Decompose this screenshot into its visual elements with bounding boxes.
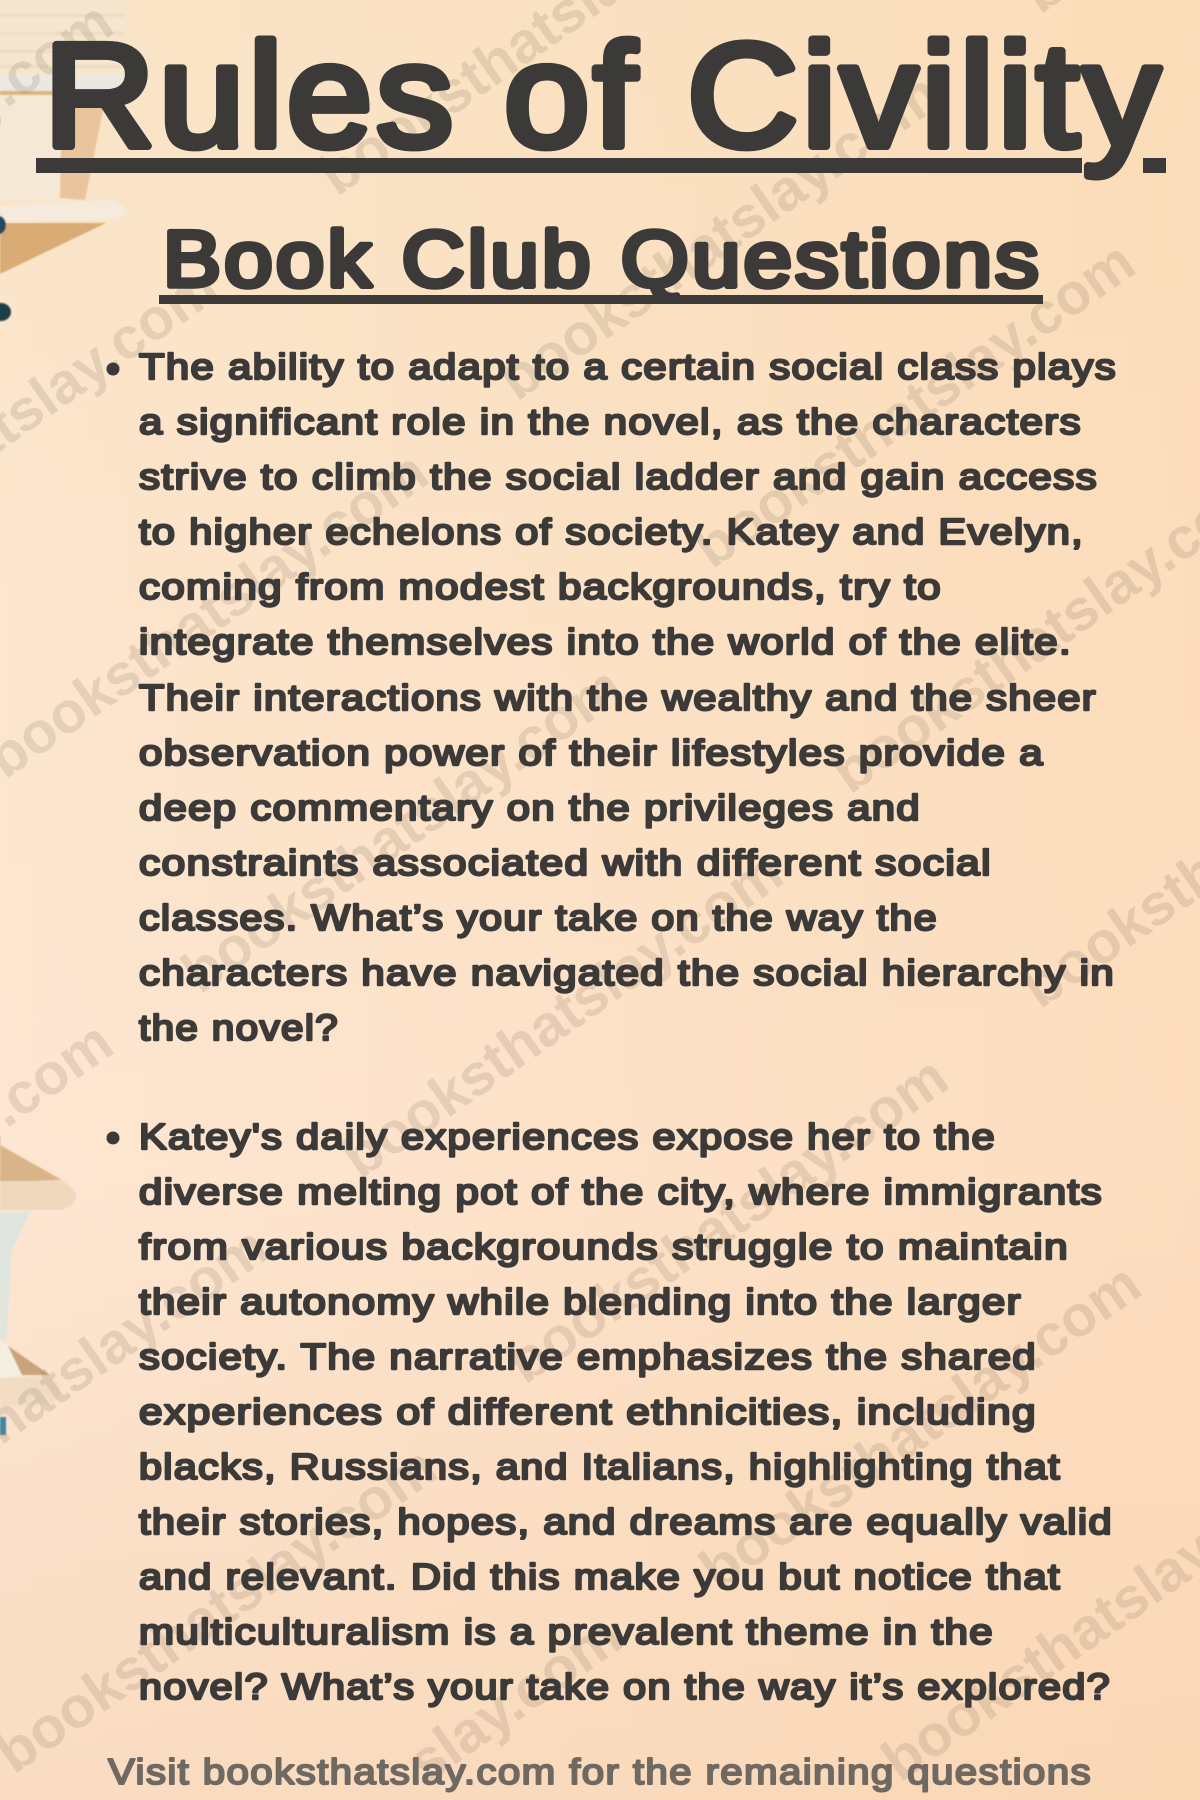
question 1 bullet text: [106, 346, 1117, 1048]
question 1 bullet text: Their interactions with the wealthy and the sheer: [139, 677, 1097, 718]
question 1 bullet text: integrate themselves into the world of the elite.: [139, 621, 1072, 662]
question 1 bullet text: deep commentary on the privileges and: [139, 787, 921, 828]
question 2 bullet text: experiences of different ethnicities, including: [139, 1391, 1037, 1432]
watermarks: booksthatslay.com: [682, 229, 1146, 581]
watermarks: booksthatslay.com: [495, 1044, 959, 1396]
question 2 bullet text: and relevant. Did this make you but notice that: [139, 1556, 1061, 1597]
question 2 bullet text: blacks, Russians, and Italians, highlighting that: [139, 1446, 1061, 1487]
footer call to action: Visit booksthatslay.com for the remaining questions: [108, 1751, 1092, 1792]
watermarks: slay.com: [396, 1602, 633, 1796]
book stack decoration, top left: [0, 0, 129, 321]
question 1 bullet text: coming from modest backgrounds, try to: [139, 566, 942, 607]
question 1 bullet text: constraints associated with different social: [139, 842, 992, 883]
watermarks: booksthatslay.com: [487, 61, 951, 413]
title: Rules of Civility: [44, 14, 1164, 178]
question 1 bullet text: strive to climb the social ladder and gain access: [139, 456, 1098, 497]
question 2 bullet text: novel? What’s your take on the way it’s explored?: [139, 1666, 1111, 1707]
question 1 bullet text: observation power of their lifestyles provide a: [139, 732, 1044, 773]
question 1 bullet text: classes. What’s your take on the way the: [139, 897, 938, 938]
question 2 bullet text: society. The narrative emphasizes the shared: [139, 1336, 1037, 1377]
question 1 bullet text: the novel?: [139, 1007, 339, 1048]
question 1 bullet text: to higher echelons of society. Katey and Evelyn,: [139, 511, 1084, 552]
watermarks: booksthatslay.com: [170, 654, 634, 1006]
question 2 bullet text: multiculturalism is a prevalent theme in the: [139, 1611, 994, 1652]
question 1 bullet text: characters have navigated the social hierarchy in: [139, 952, 1115, 993]
question 2 bullet text: [106, 1116, 1113, 1707]
question 2 bullet text: Katey's daily experiences expose her to the: [139, 1116, 996, 1157]
watermarks: booksthatslay.com: [330, 839, 794, 1191]
subtitle: Book Club Questions: [163, 214, 1042, 303]
book stack decoration, lower left: [0, 1145, 76, 1435]
question 2 bullet text: their autonomy while blending into the larger: [139, 1281, 1022, 1322]
watermarks: booksthatslay.com: [688, 1251, 1152, 1603]
question 1 bullet text: The ability to adapt to a certain social class plays: [139, 346, 1117, 387]
question 2 bullet text: diverse melting pot of the city, where immigrants: [139, 1171, 1103, 1212]
question 1 bullet text: a significant role in the novel, as the characters: [139, 401, 1082, 442]
question 2 bullet text: their stories, hopes, and dreams are equally valid: [139, 1501, 1113, 1542]
question 2 bullet text: from various backgrounds struggle to maintain: [139, 1226, 1069, 1267]
